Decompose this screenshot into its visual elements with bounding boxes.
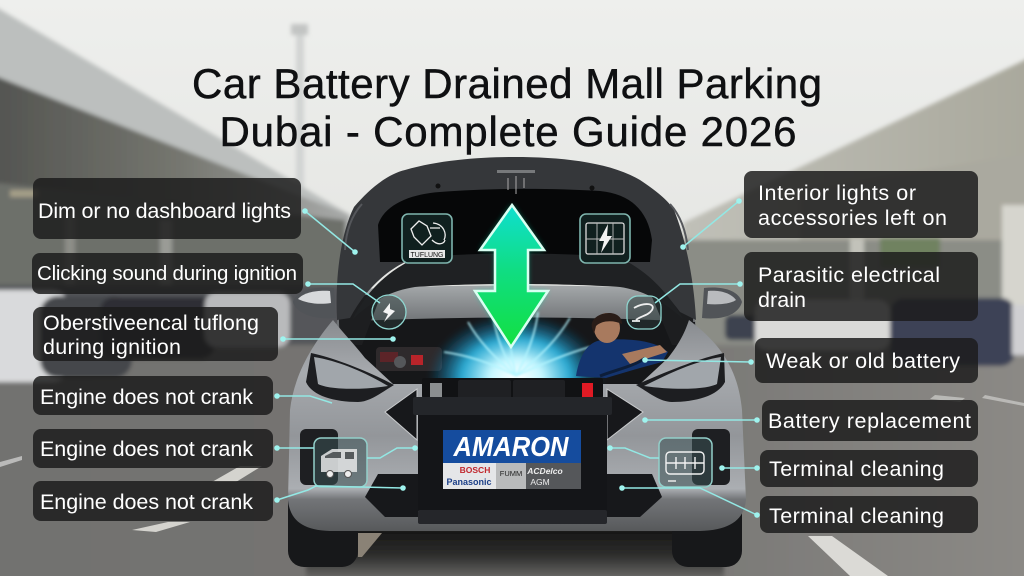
label: obstructive tuflong: during ignition <box>43 335 181 359</box>
under-car shadow <box>306 528 724 576</box>
mirrors <box>293 288 742 318</box>
glowing up-down arrow <box>475 205 548 347</box>
battery label: AMARON <box>453 431 569 462</box>
title <box>192 60 822 155</box>
icon: brain and bulb tile <box>402 214 452 263</box>
label: battery replacement <box>762 400 978 441</box>
battery label: BOSCH <box>460 465 490 475</box>
battery label <box>443 430 581 489</box>
title: Dubai - Complete Guide 2026 <box>220 108 796 155</box>
mechanic <box>576 313 668 378</box>
label: obstructive tuflong <box>33 307 278 361</box>
icon: lightning circle <box>372 295 406 329</box>
label: interior lights: Interior lights or <box>758 181 916 205</box>
label: dim lights <box>33 178 301 239</box>
energy burst <box>428 310 604 442</box>
label: dim lights: Dim or no dashboard lights <box>38 199 291 223</box>
lamp post <box>296 30 304 220</box>
label: engine does not crank 1: Engine does not crank <box>40 385 253 409</box>
label: weak battery <box>755 338 978 383</box>
body <box>288 320 746 531</box>
label: parasitic drain: Parasitic electrical <box>758 263 940 287</box>
label: engine does not crank 1 <box>33 376 273 415</box>
battery label: AGM <box>530 477 550 487</box>
label: interior lights: accessories left on <box>758 206 947 230</box>
label: engine does not crank 3 <box>33 481 273 521</box>
windscreen and engine bay <box>330 286 700 385</box>
icon: brain and bulb tile: TUFLUNG <box>410 250 444 259</box>
label: engine does not crank 3: Engine does not crank <box>40 490 253 514</box>
label: parasitic drain <box>744 252 978 321</box>
label: weak battery: Weak or old battery <box>766 349 960 373</box>
label: clicking sound: Clicking sound during ignition <box>37 262 297 285</box>
title: Car Battery Drained Mall Parking <box>192 60 822 107</box>
icon: battery terminals tile <box>659 438 712 487</box>
label: obstructive tuflong: Oberstiveencal tuflong <box>43 311 259 335</box>
label: clicking sound <box>32 253 303 294</box>
label: engine does not crank 2 <box>33 429 273 468</box>
icon: vehicle tile <box>314 438 367 487</box>
label: battery replacement: Battery replacement <box>768 409 971 433</box>
label: engine does not crank 2: Engine does not crank <box>40 437 253 461</box>
panel: right cause and fix labels <box>744 171 978 533</box>
label: parasitic drain: drain <box>758 288 806 312</box>
battery label: FUMM <box>500 469 522 478</box>
battery <box>413 378 612 524</box>
connector lines <box>274 198 760 518</box>
label: terminal cleaning 1 <box>760 450 978 487</box>
panel: left symptom labels <box>32 178 303 521</box>
car <box>288 157 746 576</box>
label: interior lights <box>744 171 978 238</box>
grille <box>300 389 730 517</box>
label: terminal cleaning 2: Terminal cleaning <box>769 504 944 528</box>
label: terminal cleaning 2 <box>760 496 978 533</box>
label: terminal cleaning 1: Terminal cleaning <box>769 457 944 481</box>
icon: lightning grid tile <box>580 214 630 263</box>
headlights <box>306 353 725 402</box>
wheels <box>288 480 742 567</box>
battery label: Panasonic <box>446 477 492 487</box>
open hood <box>337 157 696 320</box>
icon: wire loop <box>627 296 661 329</box>
battery label: ACDelco <box>526 466 563 476</box>
